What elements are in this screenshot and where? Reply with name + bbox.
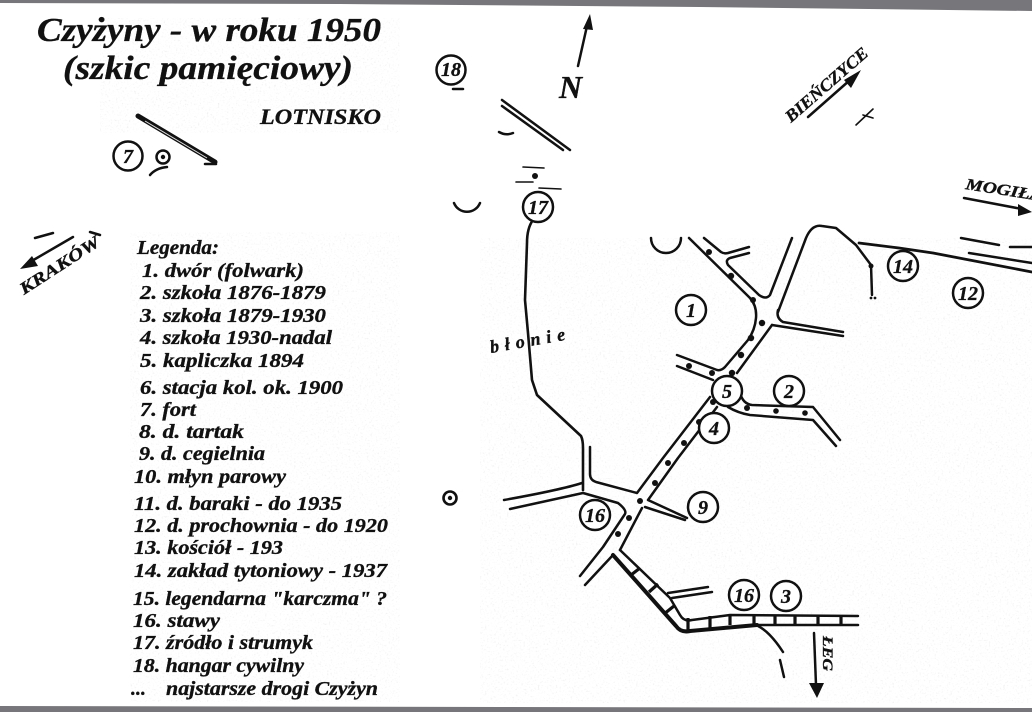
railway ticks on south road [631,568,841,631]
label: lotnisko: LOTNISKO [259,104,381,129]
title: (szkic pamięciowy) [63,50,353,87]
airfield strip [138,116,216,175]
marker 18 [436,56,466,89]
marker 2: 2 [783,381,794,403]
label: błonie: błonie [488,323,572,357]
road fragment north [499,100,570,150]
stream and spring [525,220,583,490]
legend: 11. d. baraki - do 1935 [134,493,342,515]
marker 2 [774,376,804,406]
legend: Legenda: [136,237,219,259]
legend: 1. dwór (folwark) [142,260,304,282]
marker 1 [676,295,706,325]
legend: 18. hangar cywilny [133,655,304,677]
marker 5 [712,376,742,406]
legend: 6. stacja kol. ok. 1900 [140,377,343,399]
legend: 16. stawy [133,610,220,632]
marker 4: 4 [708,418,719,440]
legend: ... [131,678,146,700]
marker 16 south: 16 [734,585,754,607]
legend: 3. szkoła 1879-1930 [139,305,326,327]
label: Bieńczyce with arrow: BIEŃCZYCE [780,43,872,127]
road: north-east branch [778,226,872,312]
marker 17 [523,192,553,222]
station symbol [444,492,456,504]
marker 1: 1 [686,300,696,322]
road: central diagonal [590,325,772,550]
marker 4 [699,413,729,443]
marker 9 [688,492,718,522]
marker 18: 18 [441,59,461,81]
legend: 17. źródło i strumyk [133,632,313,654]
marker 17: 17 [528,197,549,219]
label: Łęg with arrow: ŁEG [819,635,835,671]
legend: 8. d. tartak [139,421,244,443]
marker 16 west [580,500,610,530]
legend: 15. legendarna "karczma" ? [133,588,387,610]
legend: 12. d. prochownia - do 1920 [134,515,388,537]
road: north-west branch [677,238,792,380]
north arrow [558,14,593,105]
label: Kraków with arrow [15,231,105,299]
legend: 9. d. cegielnia [139,443,265,465]
marker 14: 14 [893,256,913,278]
stream branch south [758,626,784,677]
road: school branch [728,393,840,446]
marker 3 [771,581,801,611]
legend: 2. szkoła 1876-1879 [139,282,326,304]
railway line east [859,243,1032,272]
map roads [504,220,1032,677]
marker 9: 9 [698,497,708,519]
marker 5: 5 [722,381,732,403]
marker 16 south [729,580,759,610]
marker 7: fort [114,142,170,170]
road: west and south-west [504,483,625,585]
north arrow: N [558,69,584,105]
label: Kraków with arrow: KRAKÓW [15,231,105,299]
road dots [615,249,876,537]
legend [131,237,388,700]
legend: 4. szkoła 1930-nadal [139,327,332,349]
marker 14 [888,251,918,281]
legend: 13. kościół - 193 [134,537,283,559]
marker 12: 12 [958,283,978,305]
road: south thick [613,555,757,631]
label: Mogiła with arrow: MOGIŁA [963,176,1032,205]
legend: najstarsze drogi Czyżyn [166,678,378,700]
title [37,12,381,87]
label: Łęg with arrow [809,633,835,698]
legend: 10. młyn parowy [134,466,286,488]
label: Mogiła with arrow [963,176,1032,216]
legend: 5. kapliczka 1894 [140,350,304,372]
legend: 14. zakład tytoniowy - 1937 [134,560,388,582]
bottom border [0,706,1032,712]
marker 7: fort: 7 [123,146,134,168]
road: east branch [772,310,843,336]
marker 12 [953,278,983,308]
top border [0,0,1032,11]
fragments near spring [454,167,681,253]
marker 3: 3 [780,586,791,608]
legend: 7. fort [140,399,198,421]
marker 16 west: 16 [585,505,605,527]
title: Czyżyny - w roku 1950 [37,12,381,49]
